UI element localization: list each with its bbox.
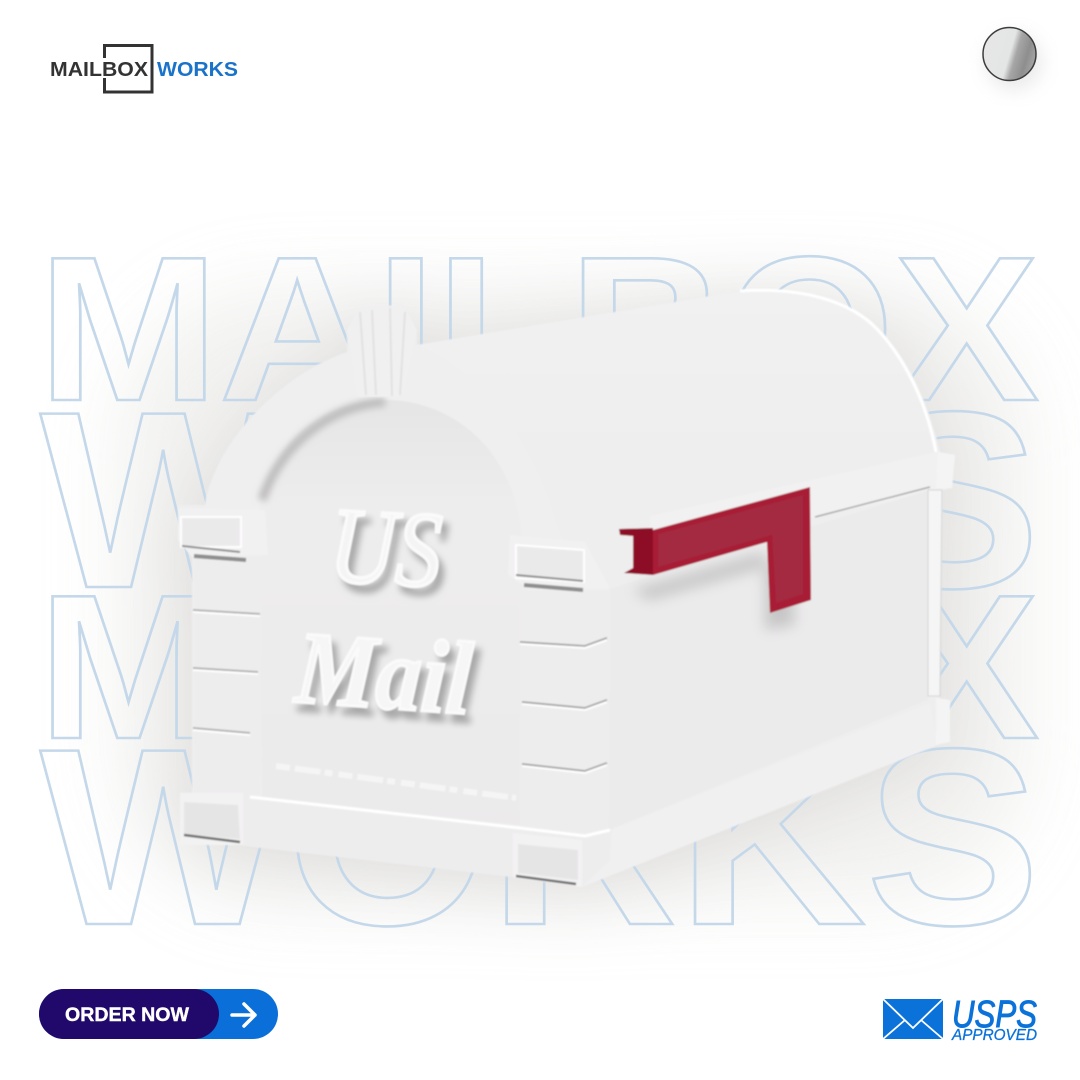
logo: [50, 46, 238, 92]
inner panel: [258, 400, 522, 835]
order now button: [39, 989, 278, 1039]
base plinth: [180, 792, 612, 887]
right pillar: [520, 590, 610, 838]
US lettering face: US: [327, 486, 445, 611]
left foot block: [180, 793, 243, 845]
button label: ORDER NOW: [65, 1005, 189, 1026]
outline text: MAILBOX row 1: MAILBOX: [38, 214, 1039, 444]
USPS text: USPS: [952, 994, 1037, 1036]
icon: envelope: [883, 999, 943, 1039]
outline text: WORKS row 1: WORKS: [40, 360, 1040, 641]
logo text: WORKS: WORKS: [157, 59, 238, 81]
embossed maker mark: [276, 766, 516, 798]
red flag: [619, 487, 811, 613]
USPS approved badge: [883, 994, 1037, 1044]
finish colour swatch: chrome: [983, 28, 1042, 90]
button blue pill: [39, 989, 278, 1039]
outline text: WORKS row 2: WORKS: [40, 697, 1040, 978]
bottom band: [582, 703, 938, 887]
right cap block: [508, 535, 610, 590]
APPROVED text: APPROVED: [951, 1027, 1037, 1044]
background outlined wordmark: [38, 214, 1040, 978]
mailbox silhouette fill: [178, 291, 955, 887]
icon: arrow: [232, 1004, 255, 1026]
inner arch shadow: [262, 402, 385, 500]
right end clips: [936, 452, 955, 745]
logo text: MAILBOX: MAILBOX: [50, 59, 149, 81]
logo square frame: [104, 46, 152, 92]
roof band: [650, 452, 955, 570]
Mail lettering face: Mail: [291, 610, 476, 737]
front arch: [192, 345, 610, 840]
mailbox soft shadow glow: [120, 290, 1030, 900]
button dark pill: [39, 989, 219, 1039]
raised lettering: Mail: [290, 610, 482, 745]
left cap block: [178, 508, 268, 560]
keystone: [347, 305, 417, 397]
base top highlight: [250, 797, 610, 836]
flag shadow: [632, 552, 795, 630]
US lettering shadow: US: [332, 494, 450, 619]
outline text: MAILBOX row 2: MAILBOX: [38, 552, 1039, 782]
lower side panel: [605, 490, 928, 832]
left pillar: [193, 555, 261, 795]
roof edge highlight: [740, 290, 936, 452]
right foot block: [513, 833, 582, 887]
Mail lettering shadow: Mail: [296, 618, 481, 745]
right end strip: [928, 490, 942, 696]
mailbox illustration: [178, 290, 955, 887]
mailbox body side: [417, 291, 940, 585]
raised lettering: US: [326, 486, 451, 619]
seam line: [815, 487, 930, 517]
